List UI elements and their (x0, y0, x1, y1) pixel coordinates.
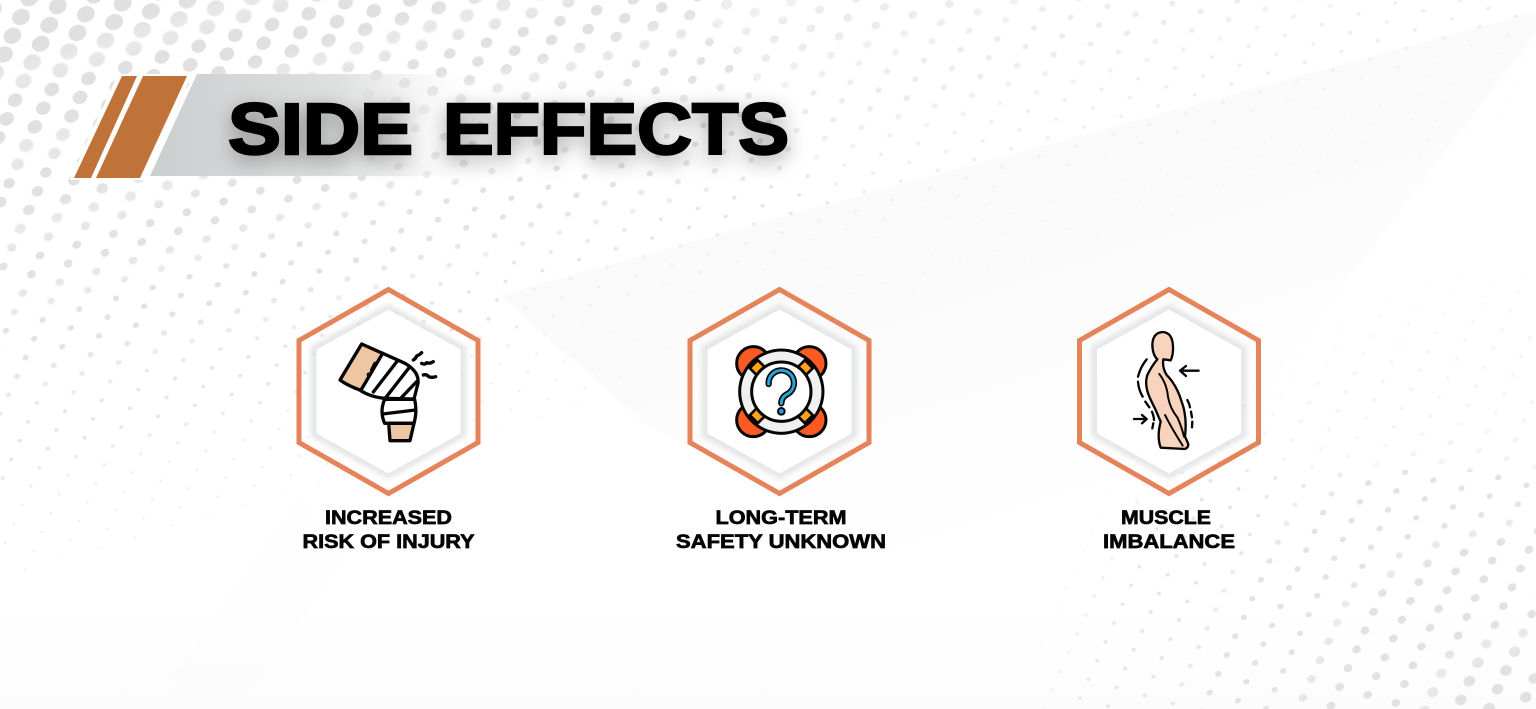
accent bars (70, 74, 192, 180)
icon: posture figure (1134, 332, 1199, 449)
heading (228, 90, 789, 170)
heading: EFFECTS (443, 90, 789, 170)
hexagon badge (299, 290, 478, 494)
panel: muscle imbalance (1080, 290, 1258, 553)
label: IMBALANCE (1103, 531, 1235, 553)
label: RISK OF INJURY (302, 531, 474, 553)
label (676, 507, 886, 553)
label: INCREASED (325, 507, 452, 529)
label: SAFETY UNKNOWN (676, 531, 886, 553)
icon: lifebuoy with question mark (737, 347, 826, 437)
title banner (70, 74, 789, 180)
icon: bandaged knee (340, 344, 436, 441)
panel: long-term safety unknown (676, 290, 886, 553)
heading: SIDE (228, 90, 413, 170)
hexagon badge (1080, 290, 1258, 494)
hexagon badge (690, 290, 869, 494)
panel: increased risk of injury (299, 290, 478, 553)
label: MUSCLE (1121, 507, 1211, 529)
label (1103, 507, 1235, 553)
banner grey strip (150, 74, 470, 176)
label: LONG-TERM (716, 507, 846, 529)
label (302, 507, 474, 553)
